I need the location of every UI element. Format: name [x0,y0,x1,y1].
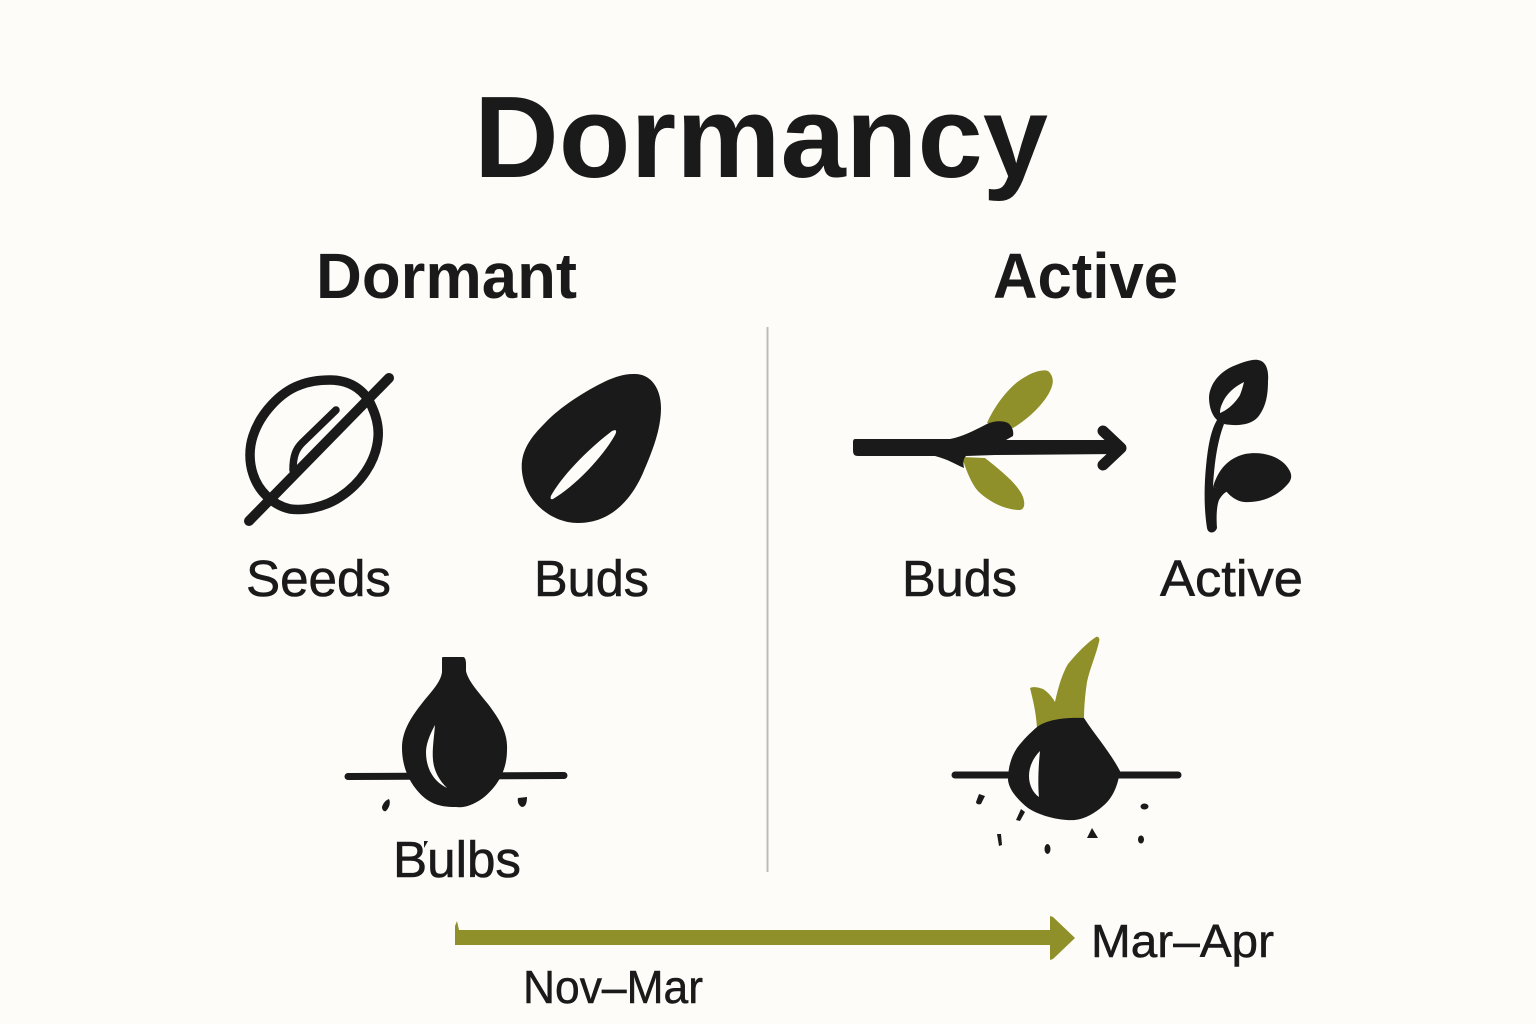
panel: active [853,360,1303,854]
heading: Dormant: Dormant [316,240,577,312]
label: Bulbs: Bulbs [393,831,521,888]
heading: Active: Active [993,240,1178,312]
icon: sprout [1205,360,1291,532]
icon: dormant bud [522,374,661,523]
timeline arrow [455,916,1075,960]
label: Buds (dormant): Buds [534,550,649,607]
label: Buds (active): Buds [902,550,1017,607]
label: Nov–Mar: Nov–Mar [523,961,703,1013]
icon: bud on branch with arrow [853,370,1121,510]
title: Dormancy [474,72,1048,202]
icon: dormant bulb [348,657,564,811]
label: Active: Active [1160,550,1303,607]
label: Seeds: Seeds [246,550,391,607]
icon: sprouting bulb [955,637,1178,854]
label: Mar–Apr: Mar–Apr [1091,915,1274,967]
icon: crossed-out seed [249,378,389,521]
panel: dormant [246,374,661,888]
